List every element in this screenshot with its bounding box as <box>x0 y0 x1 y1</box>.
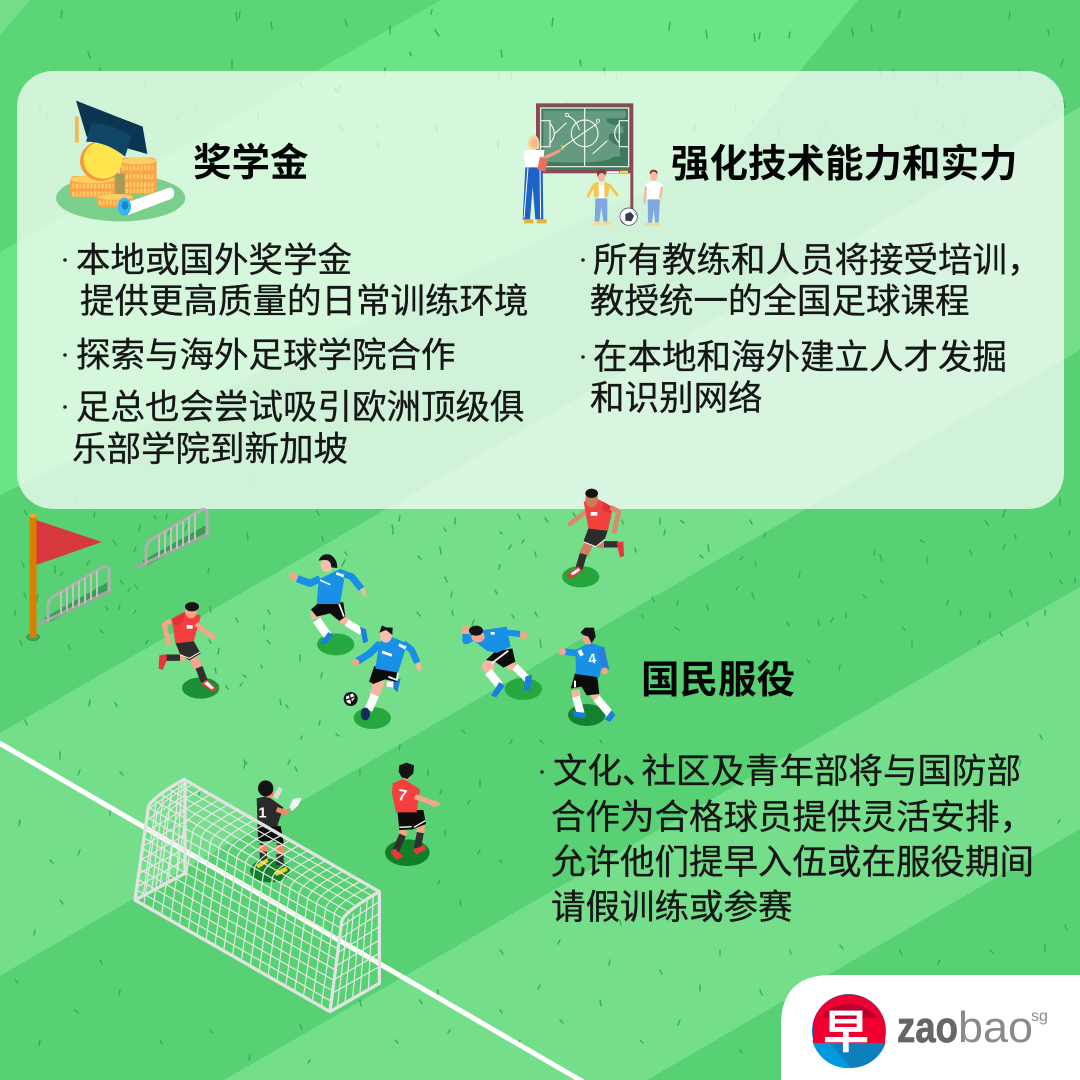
player: red forward <box>562 489 624 587</box>
text block: national service: 请假训练或参赛 <box>551 889 792 927</box>
text block: scholarship bullets <box>63 242 528 469</box>
text block: national service: 文化、社区及青年部将与国防部 <box>553 753 1021 791</box>
icon: coach at tactics board with students <box>523 103 663 226</box>
icon: graduation cap and gold coins <box>56 101 185 221</box>
logo: zaobao wordmark: sg <box>1031 1008 1048 1025</box>
net: frame <box>135 779 379 1012</box>
player: blue number 4 <box>559 628 615 726</box>
player: blue striker kicking <box>352 625 421 729</box>
text block: training bullets: 在本地和海外建立人才发掘 <box>593 339 1007 377</box>
student in white shirt <box>644 170 663 226</box>
player: goalkeeper: 1 <box>258 805 266 821</box>
text block: scholarship bullets: 乐部学院到新加坡 <box>72 431 348 469</box>
text block: scholarship bullets: 足总也会尝试吸引欧洲顶级俱 <box>76 389 524 427</box>
net: right side <box>332 897 379 1007</box>
football on ground <box>620 208 637 225</box>
tactics board <box>536 103 633 212</box>
logo: zaobao roundel: 早 <box>823 1006 869 1058</box>
text block: scholarship bullets: 探索与海外足球学院合作 <box>76 337 456 375</box>
corner flag <box>26 514 102 641</box>
logo: zaobao wordmark <box>897 1003 1048 1052</box>
heading: 国民服役: 国民服役 <box>641 659 795 702</box>
net: main roof and back face <box>135 779 371 1007</box>
white pitch line <box>0 740 585 1080</box>
heading: 奖学金: 奖学金 <box>193 142 309 185</box>
student in yellow jacket <box>587 169 618 225</box>
scattered grass tufts <box>40 10 1065 151</box>
players upper group <box>159 554 421 729</box>
coin stacks <box>70 158 157 207</box>
logo: zaobao wordmark: zao <box>897 1003 958 1052</box>
coach <box>523 135 565 223</box>
player: blue runner crouching <box>461 626 542 700</box>
text block: scholarship bullets: 提供更高质量的日常训练环境 <box>80 283 528 321</box>
football <box>344 692 358 706</box>
net: left side <box>137 782 185 895</box>
text block: national service: 合作为合格球员提供灵活安排， <box>551 799 1034 837</box>
player: blue defender with long hair <box>289 554 368 655</box>
logo: zaobao wordmark: bao <box>958 1003 1033 1052</box>
player: red number 7 <box>385 763 440 866</box>
text block: training bullets: 和识别网络 <box>590 380 762 418</box>
text block: national service <box>540 753 1034 927</box>
barrier: left <box>37 566 112 625</box>
panel: translucent info card <box>17 71 1064 509</box>
text block: training bullets: 所有教练和人员将接受培训， <box>593 242 1042 280</box>
text block: training bullets <box>581 242 1042 418</box>
player: red number 7: 7 <box>397 787 408 805</box>
logo card <box>781 975 1080 1080</box>
text block: national service: 允许他们提早入伍或在服役期间 <box>551 844 1034 882</box>
player: blue number 4: 4 <box>587 650 597 667</box>
text block: training bullets: 教授统一的全国足球课程 <box>590 283 970 321</box>
logo: zaobao roundel <box>812 994 886 1068</box>
player: goalkeeper <box>250 780 301 882</box>
text block: scholarship bullets: 本地或国外奖学金 <box>76 242 352 280</box>
heading: 强化技术能力和实力: 强化技术能力和实力 <box>671 143 1018 186</box>
goal net <box>135 779 379 1012</box>
players right group <box>461 489 624 726</box>
player: red midfielder <box>159 602 219 699</box>
barrier: right <box>135 510 210 568</box>
players near the goal <box>135 763 440 1012</box>
